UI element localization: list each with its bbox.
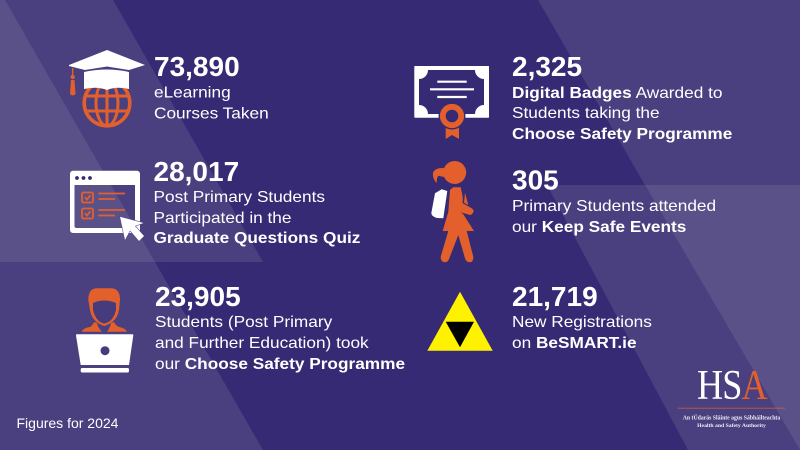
stat: digital badges (414, 51, 732, 143)
label: programme description: Students (Post Primary (155, 313, 333, 331)
label: quiz description: Graduate Questions Quiz (154, 229, 360, 247)
label: programme description (155, 313, 405, 373)
figure: 2,325: 2,325 (512, 51, 582, 82)
label: quiz description: Post Primary Students (154, 188, 325, 206)
icon: student at laptop (76, 288, 133, 372)
stat: Keep Safe events (431, 161, 716, 262)
stat: Choose Safety Programme students (76, 281, 405, 373)
figure: 21,719: 21,719 (512, 281, 598, 312)
label: badges description: Choose Safety Programme (512, 125, 732, 143)
label: events description: Primary Students attended (512, 197, 716, 215)
icon: graduation cap and globe (69, 50, 145, 126)
icon: yellow triangle logo (427, 292, 493, 351)
label: programme description: and Further Education) took (155, 334, 369, 352)
label: registrations description: New Registrations (512, 313, 652, 331)
figure: 73,890: 73,890 (154, 51, 240, 82)
label: programme description: our Choose Safety Programme (155, 355, 405, 373)
footnote: figures year: Figures for 2024 (16, 415, 119, 431)
stat: BeSMART registrations (427, 281, 652, 352)
stat: quiz participants (70, 156, 360, 247)
label: registrations description: on BeSMART.ie (512, 334, 637, 352)
label: badges description: Digital Badges Awarded to (512, 84, 722, 102)
icon: schoolgirl with backpack (431, 161, 474, 262)
stat: eLearning courses (69, 50, 269, 126)
figure: 305: 305 (512, 164, 559, 196)
icon: browser quiz with cursor (70, 171, 144, 241)
figure: 23,905: 23,905 (155, 281, 241, 312)
figure: 28,017: 28,017 (154, 156, 239, 187)
label: quiz description (154, 188, 360, 247)
label: events description (512, 197, 716, 236)
label: badges description: Students taking the (512, 104, 660, 122)
icon: certificate with rosette (414, 66, 489, 139)
logo: Health and Safety Authority: HSA (697, 363, 767, 409)
label: events description: our Keep Safe Events (512, 218, 686, 236)
label: eLearning Courses Taken: Courses Taken (154, 104, 269, 122)
logo: Health and Safety Authority: An tÚdarás Sláinte agus Sábháilteachta (683, 414, 780, 422)
label: registrations description (512, 313, 652, 352)
label: eLearning Courses Taken: eLearning (154, 83, 231, 101)
logo: Health and Safety Authority (678, 363, 785, 429)
label: quiz description: Participated in the (154, 209, 291, 227)
label: badges description (512, 84, 732, 143)
logo: Health and Safety Authority: Health and Safety Authority (697, 423, 766, 429)
label: eLearning Courses Taken (154, 83, 269, 122)
